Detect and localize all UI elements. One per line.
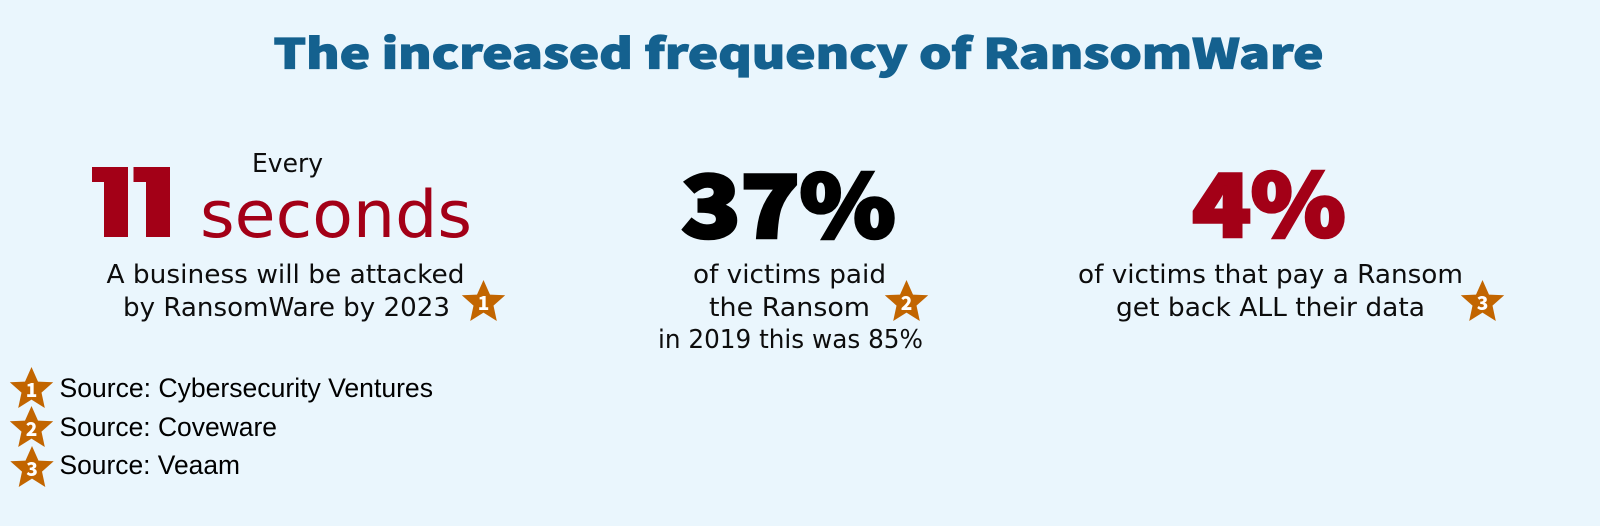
description: business attack: A business will be attacked: [106, 260, 464, 290]
legend: sources: [10, 367, 433, 487]
icon: legend star 3: 3: [26, 455, 38, 482]
description: victims data: get back ALL their data: [1116, 293, 1425, 323]
description: victims paid: the Ransom: [709, 293, 870, 323]
source: Veaam: Source: Veaam: [60, 450, 240, 480]
panel: 11 seconds: [92, 153, 506, 322]
icon: star 2: [885, 280, 928, 321]
source: Cybersecurity Ventures: Source: Cybersecurity Ventures: [60, 373, 433, 403]
description: business attack: by RansomWare by 2023: [123, 293, 450, 323]
icon: legend star 2: [10, 406, 53, 447]
big number: 11: 1: [89, 131, 143, 258]
description: victims data: of victims that pay a Ransom: [1078, 260, 1463, 290]
description: victims data: [1078, 260, 1463, 323]
icon: star 1: [462, 280, 505, 321]
big number: 11: 1: [131, 131, 185, 258]
description: victims paid: [658, 260, 923, 355]
big number: 11: [92, 167, 170, 237]
icon: star 3: [1461, 280, 1504, 321]
icon: star 3: 3: [1477, 289, 1488, 316]
icon: legend star 2: 2: [26, 415, 37, 442]
big number: 37%: 37%: [682, 138, 896, 262]
big number: 4%: 4%: [1192, 136, 1346, 262]
source: Coveware: Source: Coveware: [60, 412, 277, 442]
text: every: Every: [252, 149, 323, 179]
icon: star 1: 1: [478, 289, 489, 316]
text: seconds: seconds: [200, 178, 472, 253]
panel: 4 percent: [1078, 136, 1504, 323]
icon: legend star 1: 1: [26, 376, 37, 403]
panel: 37 percent: [658, 138, 928, 355]
icon: star 2: 2: [901, 289, 912, 316]
description: victims paid: of victims paid: [693, 260, 886, 290]
icon: legend star 1: [10, 367, 53, 408]
description: victims paid: in 2019 this was 85%: [658, 325, 923, 355]
description: business attack: [106, 260, 464, 323]
icon: legend star 3: [10, 446, 54, 487]
title: The increased frequency of RansomWare: [274, 20, 1324, 80]
